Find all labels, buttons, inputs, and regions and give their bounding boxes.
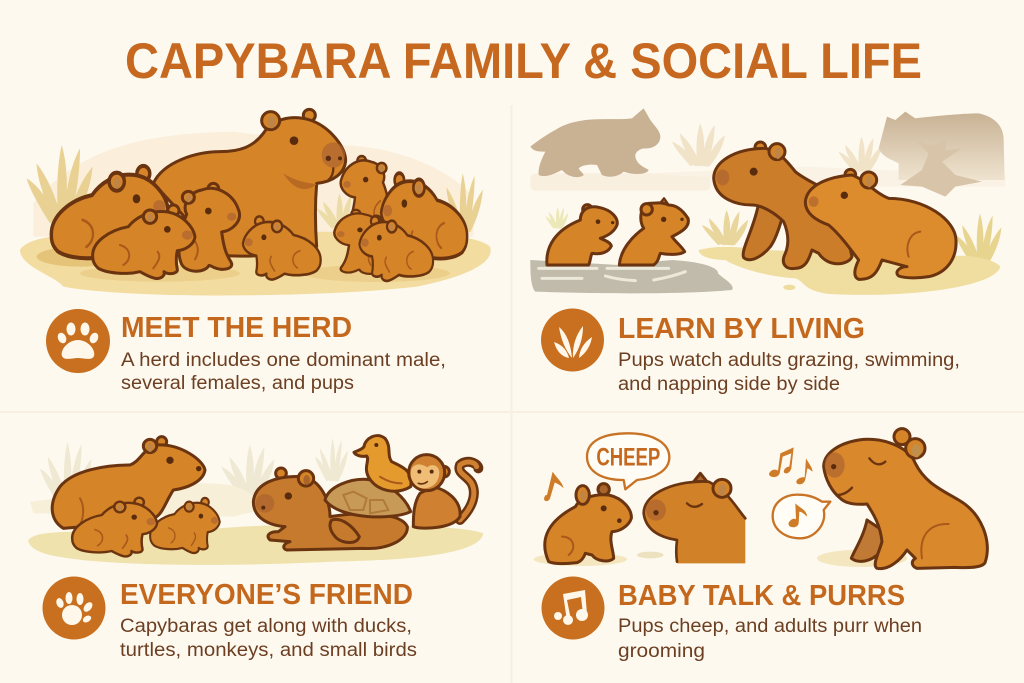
- section: baby talk and purrs: [542, 576, 922, 662]
- heading: EVERYONE’S FRIEND: [120, 579, 413, 611]
- icon: grass: [541, 308, 604, 372]
- panel: baby talk illustration: [534, 429, 987, 569]
- note speech bubble: [773, 495, 830, 538]
- panel: everyone's friend illustration: [28, 436, 483, 565]
- text block: Pups watch adults grazing, swimming,: [618, 350, 960, 371]
- panel: learn by living illustration: [530, 108, 1005, 295]
- section: learn by living: [541, 308, 960, 395]
- music note left: [544, 472, 564, 501]
- text block: Pups cheep, and adults purr when: [618, 616, 922, 637]
- icon: paw: [46, 309, 110, 373]
- title: CAPYBARA FAMILY & SOCIAL LIFE: [125, 33, 922, 89]
- swimming pups: [547, 198, 688, 265]
- icon: music note: [542, 576, 604, 640]
- big capybara: [153, 109, 346, 256]
- panel: meet the herd illustration: [20, 109, 491, 295]
- pups: [51, 156, 467, 281]
- heading: MEET THE HERD: [121, 312, 352, 344]
- adult capybaras: [714, 142, 956, 279]
- grass and ground: [545, 207, 568, 229]
- predator shadow left: [530, 108, 660, 177]
- text block: several females, and pups: [121, 373, 354, 394]
- pup: [545, 484, 631, 564]
- predator shadow right: [879, 112, 1005, 180]
- water: [530, 260, 733, 293]
- cheep speech bubble: CHEEP: [596, 444, 660, 472]
- text block: Capybaras get along with ducks,: [120, 616, 412, 637]
- section: everyone's friend: [42, 576, 417, 661]
- adult capybara: [52, 437, 205, 528]
- icon: paw: [42, 576, 106, 640]
- monkey: [409, 455, 478, 528]
- heading: LEARN BY LIVING: [618, 313, 865, 345]
- adult head: [644, 473, 745, 563]
- adult capybara singing: [824, 429, 987, 569]
- text block: grooming: [618, 641, 705, 662]
- section: meet the herd: [46, 309, 446, 394]
- music notes: [769, 447, 813, 484]
- text block: and napping side by side: [618, 374, 840, 395]
- turtle shell: [325, 479, 411, 517]
- text block: turtles, monkeys, and small birds: [120, 640, 417, 661]
- cheep speech bubble: [587, 433, 669, 489]
- heading: BABY TALK & PURRS: [618, 580, 905, 612]
- duck: [354, 436, 411, 491]
- text block: A herd includes one dominant male,: [121, 350, 446, 371]
- two pups: [72, 498, 220, 556]
- capybara with turtle: [253, 468, 407, 550]
